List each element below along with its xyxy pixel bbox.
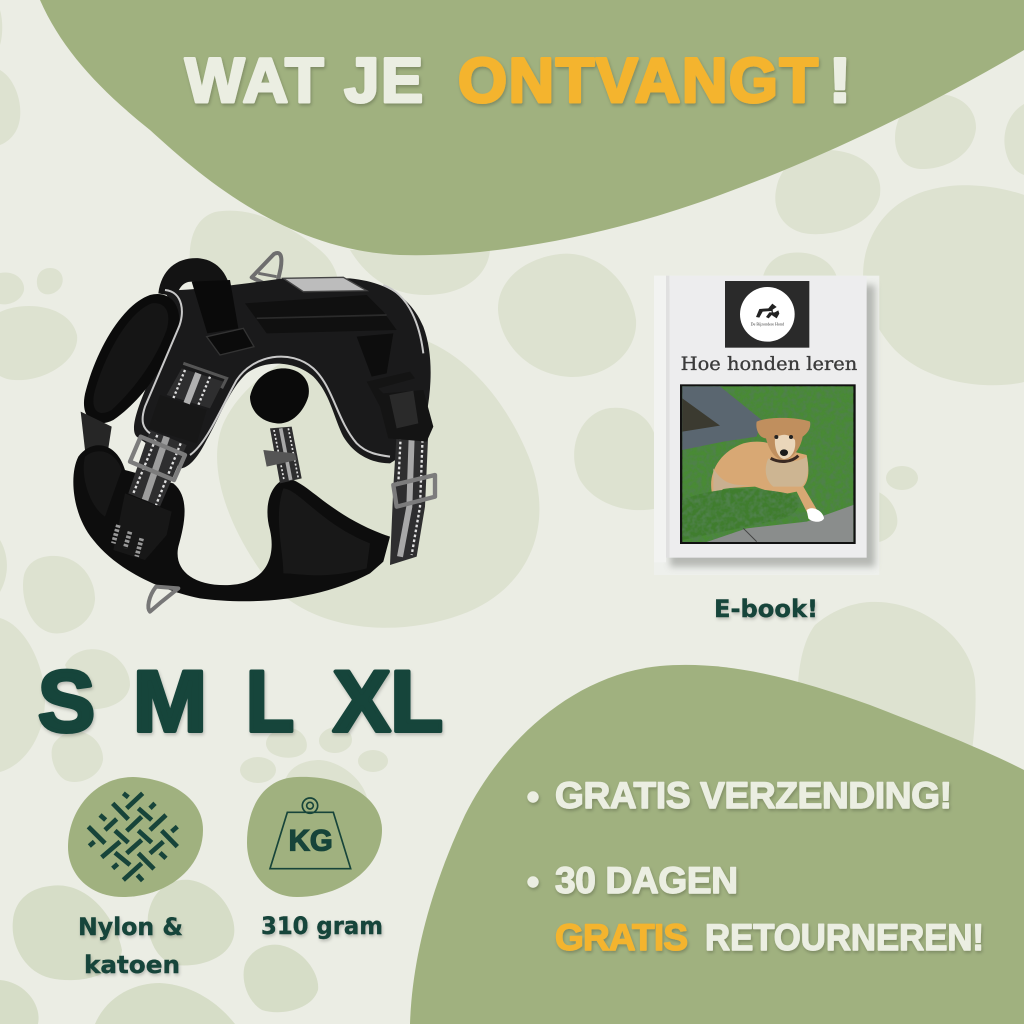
- icon: kilogram weight: KG: [289, 824, 333, 857]
- sizes: M: [133, 654, 207, 750]
- icon: woven fabric: [88, 793, 177, 881]
- velcro panels: [245, 295, 397, 333]
- left lower strap: [128, 430, 187, 507]
- sizes: [38, 654, 443, 750]
- vertical webbing loop: [192, 280, 238, 333]
- sizes: L: [246, 654, 294, 750]
- centre pad: [250, 368, 309, 423]
- plastic buckle: [367, 372, 433, 442]
- bullet: free returns: RETOURNEREN!: [705, 917, 984, 958]
- e-book label: E-book!: [714, 595, 818, 623]
- D-ring: [252, 253, 281, 289]
- centre strap: [263, 427, 302, 483]
- book sheet: [654, 276, 879, 575]
- bullet: free returns: GRATIS: [555, 917, 688, 958]
- shadow: [670, 285, 875, 567]
- reflective piping: [143, 285, 423, 457]
- title: !: [829, 46, 851, 116]
- lower clip: [148, 587, 178, 612]
- lower pad and chest strap: [73, 445, 390, 601]
- left lower keeper: [113, 493, 172, 560]
- material feature: [68, 777, 203, 979]
- back panel: [134, 278, 431, 468]
- benefits list: [528, 775, 984, 958]
- bullet: free returns: [528, 860, 984, 958]
- logo: De Bijzondere Hond: [751, 322, 784, 326]
- title: ONTVANGT: [458, 46, 818, 116]
- title: WAT JE: [185, 46, 423, 116]
- material blob: [68, 777, 203, 897]
- material label: [78, 913, 183, 979]
- right slider: [393, 475, 435, 507]
- sizes: S: [38, 654, 95, 750]
- bullet: free shipping: GRATIS VERZENDING!: [555, 775, 952, 816]
- right strap: [357, 333, 393, 377]
- top left strap: [148, 363, 227, 443]
- label patch: [283, 277, 367, 292]
- title: [185, 46, 851, 116]
- logo: [725, 281, 809, 348]
- handle: [158, 258, 232, 298]
- weight blob: [247, 777, 382, 897]
- material label: Nylon &: [78, 913, 183, 941]
- harness product illustration: [73, 253, 435, 612]
- bottom right green blob: [410, 665, 1024, 1024]
- book title: Hoe honden leren: [681, 354, 857, 375]
- e-book cover: [654, 276, 879, 575]
- puppy photo: [680, 384, 856, 544]
- bullet: free returns: 30 DAGEN: [555, 860, 738, 901]
- sizes: XL: [333, 654, 443, 750]
- material label: katoen: [84, 951, 180, 979]
- icon: kilogram weight: [270, 798, 351, 869]
- cover: [669, 276, 867, 558]
- left shoulder pad: [84, 294, 179, 423]
- weight label: 310 gram: [261, 912, 383, 940]
- background paw blobs: [0, 10, 1024, 805]
- left slider buckle: [130, 437, 185, 480]
- connector strap: [81, 412, 112, 450]
- top green blob: [40, 0, 1024, 255]
- weight feature: [247, 777, 383, 940]
